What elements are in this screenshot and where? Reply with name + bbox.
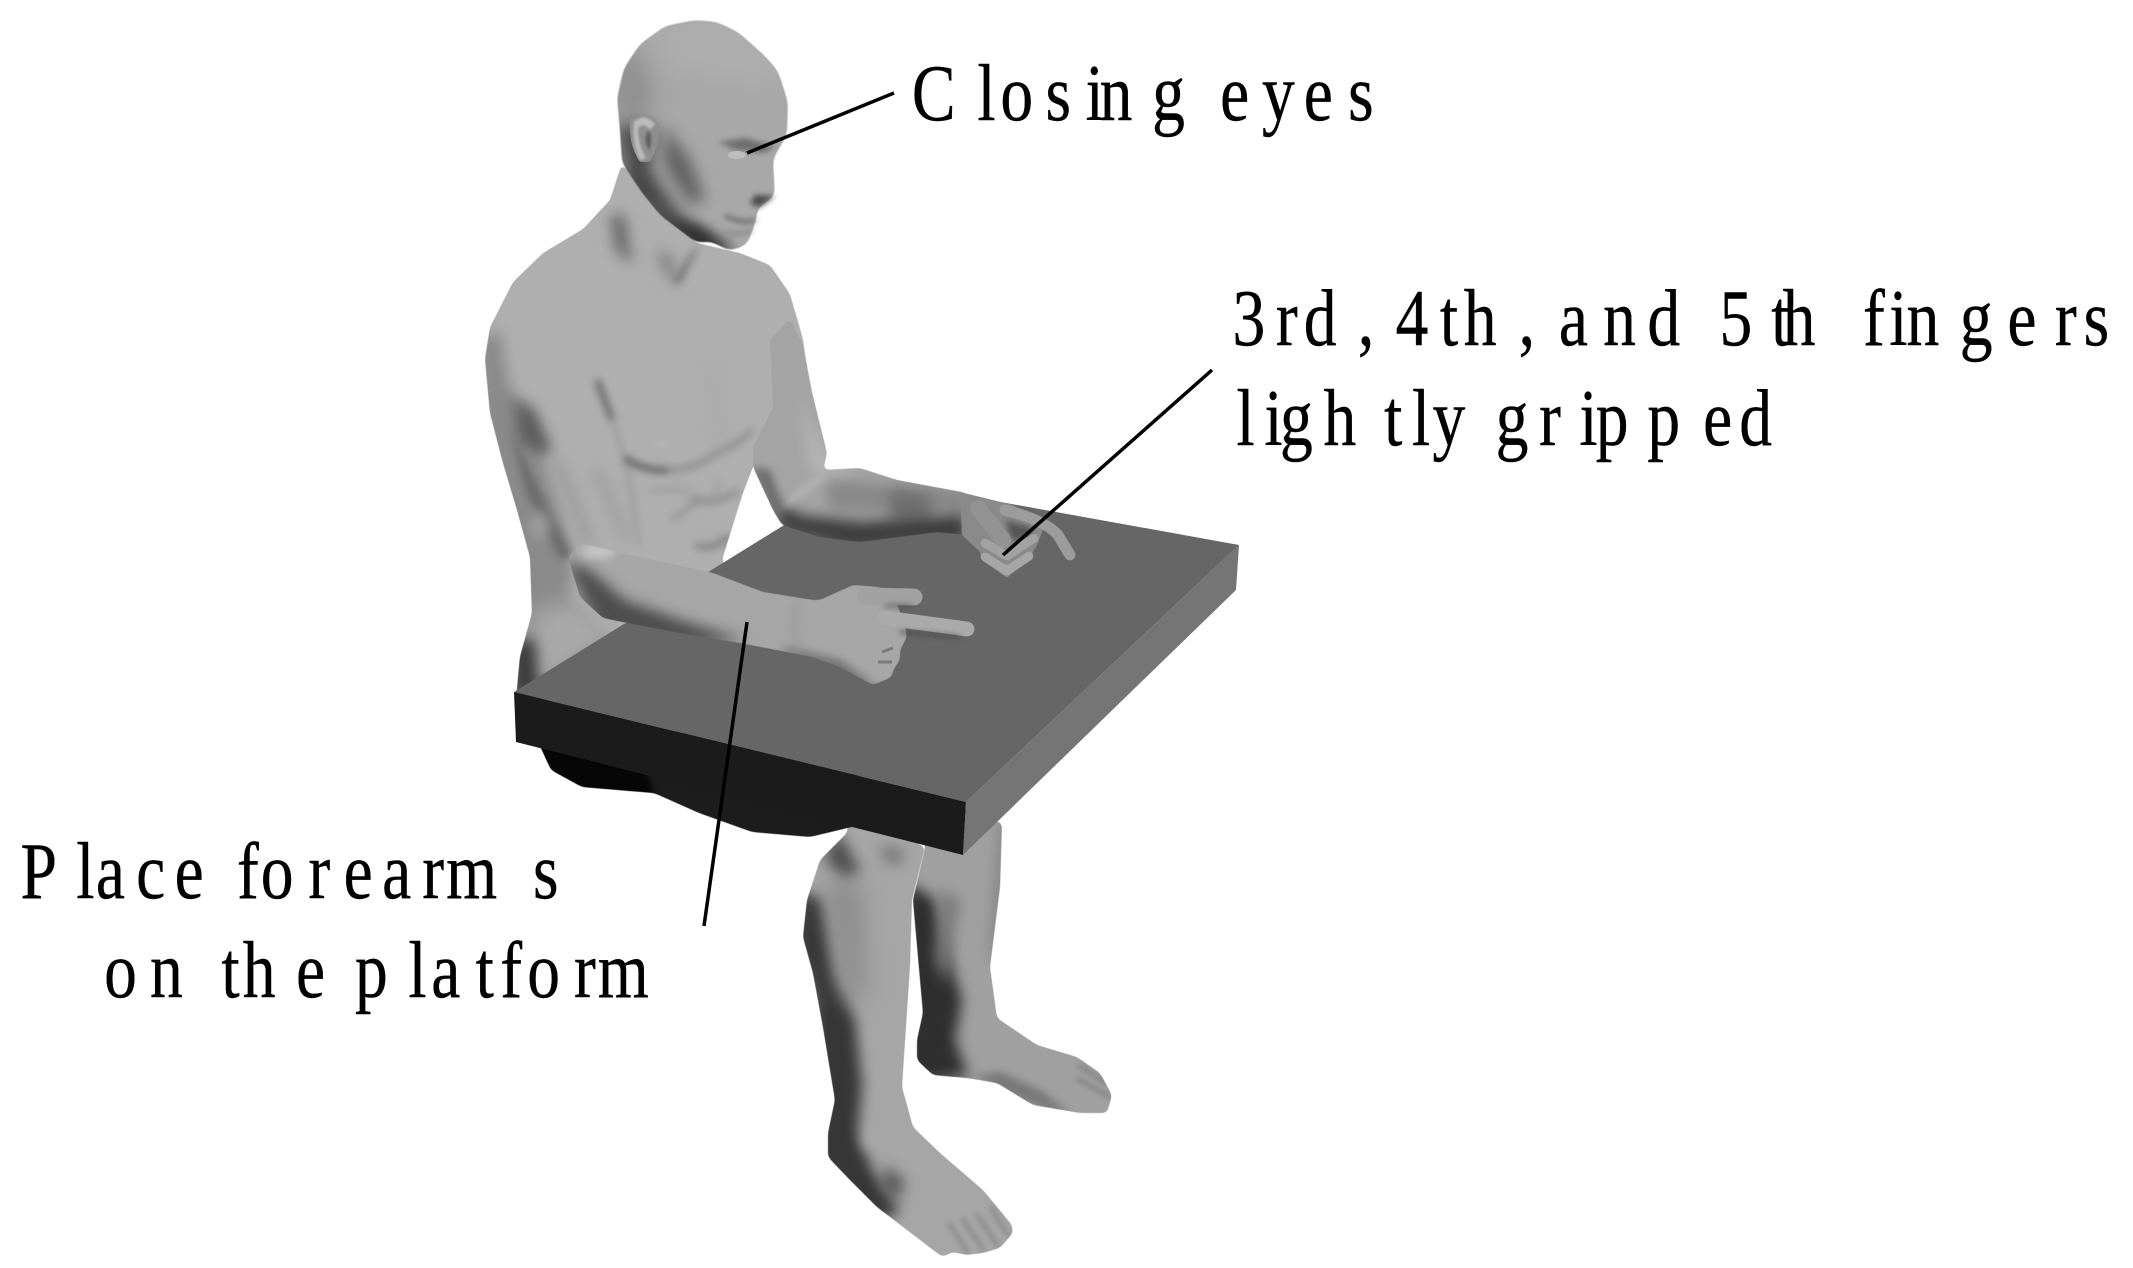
label: fingers, line 2: lightly gripped [1237,374,1772,462]
back band [485,327,576,690]
near forearm and pointing hand [565,543,967,688]
head [617,10,790,251]
label: forearms, line 1: Place forearms [21,827,559,915]
thumb [978,508,1003,540]
thumb shadow [885,605,912,607]
finger shadow [900,632,960,637]
upper arm muscles [598,477,624,532]
leader line: closing eyes [747,93,894,153]
gripped finger 3 [985,538,1034,556]
armpit crease [597,380,612,420]
torso and upper arms [480,163,810,700]
label: fingers, line 1: 3rd, 4th, and 5th fingers [1232,274,2109,362]
platform [514,477,1239,855]
abdominal shadows [690,490,738,501]
near leg and foot [795,810,1013,1257]
thumb [865,596,914,597]
curled knuckles [878,648,893,662]
face details [718,138,775,234]
figure: seated man with platform [480,10,1239,1257]
ear [630,114,659,162]
pointing finger [1005,510,1070,555]
far leg and foot [912,812,1112,1114]
shadow between thumb and index [1005,520,1032,540]
label: closing eyes: Closing eyes [912,49,1374,137]
far arm [753,318,970,548]
platform top face [514,477,1239,802]
leader line: forearm on platform [704,622,747,926]
label: forearms, line 2: on the platform [104,926,649,1014]
thigh shadow under platform [535,720,860,837]
neck shading [610,215,632,265]
leader line: gripped fingers [1003,370,1212,555]
platform front face [514,692,966,855]
far hand with gripped fingers [960,492,1070,578]
gripped finger 4 [985,556,1029,571]
index finger [885,618,967,629]
pectoral underline [625,458,668,470]
platform right face [963,545,1239,855]
